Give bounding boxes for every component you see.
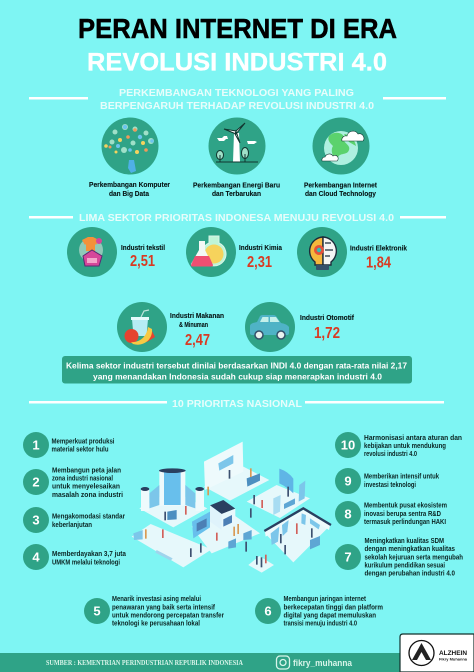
label: renewable energy: dan Terbarukan [212,191,261,198]
callout: INDI 4.0 summary [62,356,412,384]
sector: electronics: 1,84 [366,254,391,272]
logo: Alzhein [400,634,474,672]
heading: technology: PERKEMBANGAN TEKNOLOGI YANG PALING [119,88,354,99]
callout: INDI 4.0 summary: Kelima sektor industri tersebut dinilai berdasarkan INDI 4.0 dengan rata-rata nilai 2,17 [66,360,407,370]
panel: right priorities [255,432,463,628]
title: REVOLUSI INDUSTRI 4.0 [87,48,387,76]
priority 3: 3 [32,512,40,528]
heading: 10 national priorities: 10 PRIORITAS NASIONAL [172,398,303,410]
priority 1: 1 [32,438,40,452]
priority 2: Membangun peta jalan [52,466,121,474]
label: internet and cloud [304,182,378,198]
priority 10: kebijakan untuk mendukung [364,441,446,450]
sector: food and beverage: 2,47 [185,332,210,349]
label: internet and cloud: dan Cloud Technology [305,191,376,198]
sector: automotive [245,302,355,352]
priority 7 [335,536,463,578]
icon: globe and clouds [312,118,370,174]
priority 7: dengan meningkatkan kualitas [364,544,455,553]
sector: food and beverage: Industri Makanan [170,313,224,320]
priority 7: Meningkatkan kualitas SDM [364,536,444,545]
sector: chemical [186,227,282,277]
priority 5: Menarik investasi asing melalui [112,594,201,603]
label: computer and big data: Perkembangan Komputer [89,182,170,189]
priority 10 [335,432,462,458]
priority 6: berkecepatan tinggi dan platform [284,602,383,612]
sector: electronics: Industri Elektronik [350,246,407,252]
priority 8: 8 [344,506,352,522]
priority 1: material sektor hulu [52,444,109,454]
priority 9 [335,468,440,494]
heading: technology: BERPENGARUH TERHADAP REVOLUSI INDUSTRI 4.0 [100,101,374,112]
priority 9: investasi teknologi [364,480,416,489]
panel: left priorities [23,432,224,628]
priority 4 [23,544,127,570]
title: PERAN INTERNET DI ERA [78,13,397,44]
sector: food and beverage [117,302,224,352]
priority 4: UMKM melalui teknologi [52,558,120,566]
icon: brain tree big data [102,118,158,174]
priority 8 [335,500,447,527]
callout: INDI 4.0 summary: yang menandakan Indonesia sudah cukup siap menerapkan industri 4.0 [93,372,382,382]
priority 5: teknologi ke perusahaan lokal [112,618,200,628]
label: renewable energy: Perkembangan Energi Baru [193,182,280,190]
priority 2: masalah zona industri [52,490,123,499]
sector: chemical: 2,31 [247,254,272,271]
heading: five priority sectors: LIMA SEKTOR PRIORITAS INDONESA MENUJU REVOLUSI 4.0 [79,213,394,224]
priority 9: 9 [344,474,352,488]
priority 2: untuk menyelesaikan [52,482,120,490]
priority 2: 2 [32,474,40,490]
priority 1: Memperkuat produksi [52,436,114,446]
priority 10: Harmonisasi antara aturan dan [364,433,462,442]
priority 5: 5 [93,604,101,618]
priority 8: inovasi berupa sentra R&D [364,509,441,518]
source text: SUMBER : KEMENTRIAN PERINDUSTRIAN REPUBLIK INDONESIA [46,659,243,667]
priority 6: transisi menuju industri 4.0 [284,618,357,628]
logo: Alzhein: ALZHEIN [439,651,467,657]
sector: textile: 2,51 [130,253,155,270]
priority 5: penawaran yang baik serta intensif [112,602,215,612]
priority 8: Membentuk pusat ekosistem [364,500,447,510]
priority 1 [23,432,114,458]
priority 4: Memberdayakan 3,7 juta [52,549,127,558]
sector: textile [67,227,165,277]
heading: technology [29,88,446,112]
priority 6: digital yang dapat memuluskan [284,610,376,620]
priority 6: Membangun jaringan internet [284,594,366,603]
priority 9: Memberikan intensif untuk [364,472,440,480]
footer bar [0,653,474,672]
priority 3: keberlanjutan [52,520,92,529]
priority 5 [84,594,224,628]
priority 2: zona industri nasional [52,474,113,482]
label: renewable energy [193,182,280,198]
priority 7: dengan perubahan industri 4.0 [364,568,455,578]
priority 3: Mengakomodasi standar [52,512,125,520]
title [78,13,397,76]
priority 5: untuk mendorong percepatan transfer [112,610,224,620]
priority 7: 7 [344,550,352,564]
instagram handle: fikry_muhanna [293,658,353,669]
sector: chemical: Industri Kimia [239,245,282,252]
sector: electronics [297,227,407,277]
logo: Alzhein: Fikry Muhanna [439,658,468,662]
priority 6: 6 [264,604,272,618]
priority 10: 10 [341,438,355,452]
icon: wind turbine [208,118,266,174]
priority 2 [23,466,123,499]
label: computer and big data: dan Big Data [109,191,149,198]
priority 10: revolusi industri 4.0 [364,449,417,458]
panel: priority sectors [67,227,407,352]
label: internet and cloud: Perkembangan Internet [304,182,378,190]
illustration: isometric expo booths [132,442,331,573]
sector: automotive: 1,72 [314,325,340,342]
priority 7: kurikulum pendidikan sesuai [364,560,445,570]
priority 3 [23,507,125,533]
priority 4: 4 [32,550,40,564]
priority 8: termasuk perlindungan HAKI [364,517,446,526]
priority 6 [255,594,383,628]
sector: textile: Industri tekstil [121,245,165,252]
panel: technology trends [89,118,378,198]
icon: instagram [276,656,290,669]
label: computer and big data [89,182,170,198]
sector: automotive: Industri Otomotif [300,315,355,322]
sector: food and beverage: & Minuman [179,322,208,329]
